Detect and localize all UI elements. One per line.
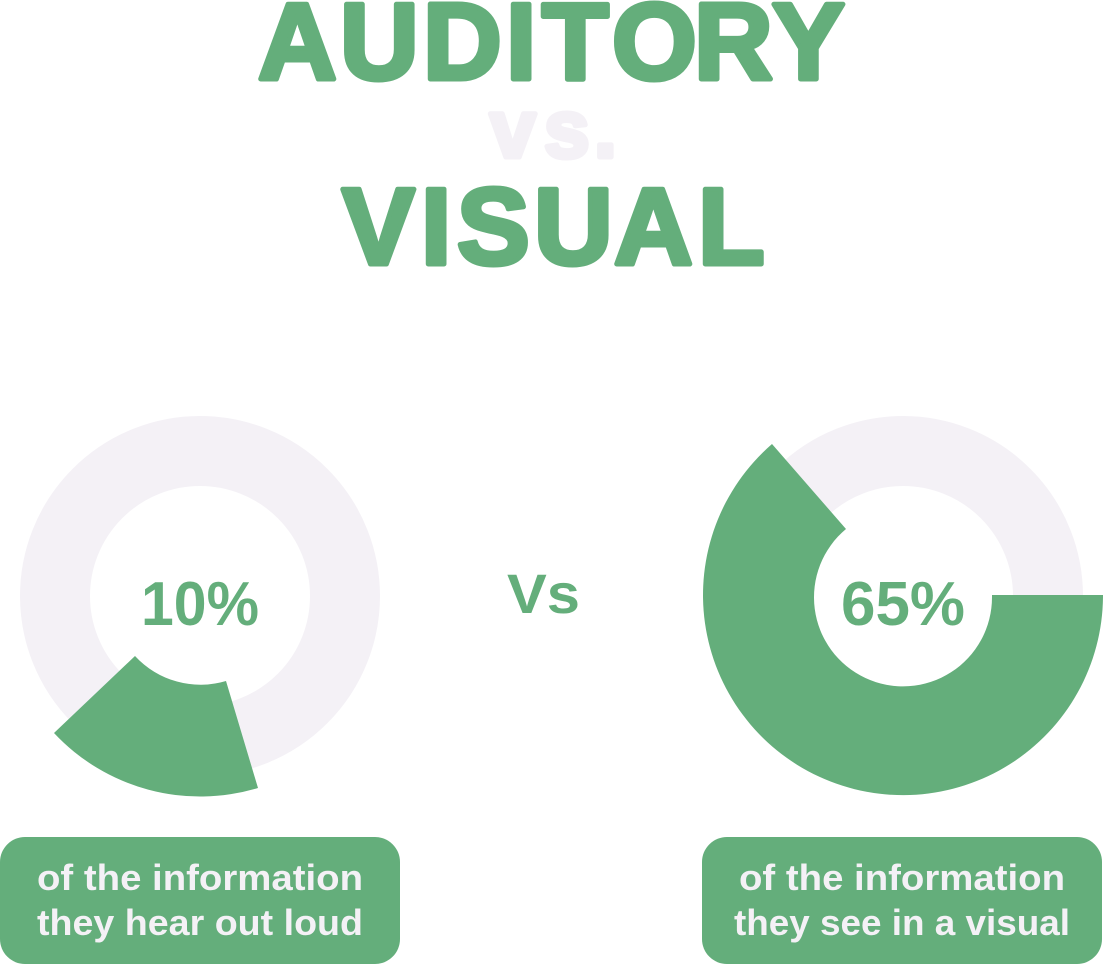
callout text: auditory	[37, 857, 363, 943]
callout text: auditory: of the information	[37, 857, 363, 898]
donut track: visual	[758, 451, 1048, 741]
versus label: Vs	[507, 562, 580, 625]
value: 10%: 10%	[141, 570, 259, 639]
callout background: auditory	[0, 837, 400, 964]
callout background: visual	[702, 837, 1102, 964]
title: vs.: vs.	[490, 84, 617, 175]
donut track: auditory	[55, 451, 345, 741]
callout: visual	[702, 837, 1102, 964]
donut segment: 10 percent	[54, 656, 258, 797]
panel: auditory donut	[54, 451, 345, 797]
callout text: visual: of the information	[739, 857, 1065, 898]
panel: visual donut	[703, 444, 1103, 795]
callout: auditory	[0, 837, 400, 964]
title: visual: VISUAL	[342, 166, 765, 288]
callout text: visual: they see in a visual	[734, 902, 1070, 943]
callout text: visual	[734, 857, 1070, 943]
callout text: auditory: they hear out loud	[37, 902, 363, 943]
value: 65%: 65%	[841, 570, 965, 639]
donut segment: 65 percent	[703, 444, 1103, 795]
